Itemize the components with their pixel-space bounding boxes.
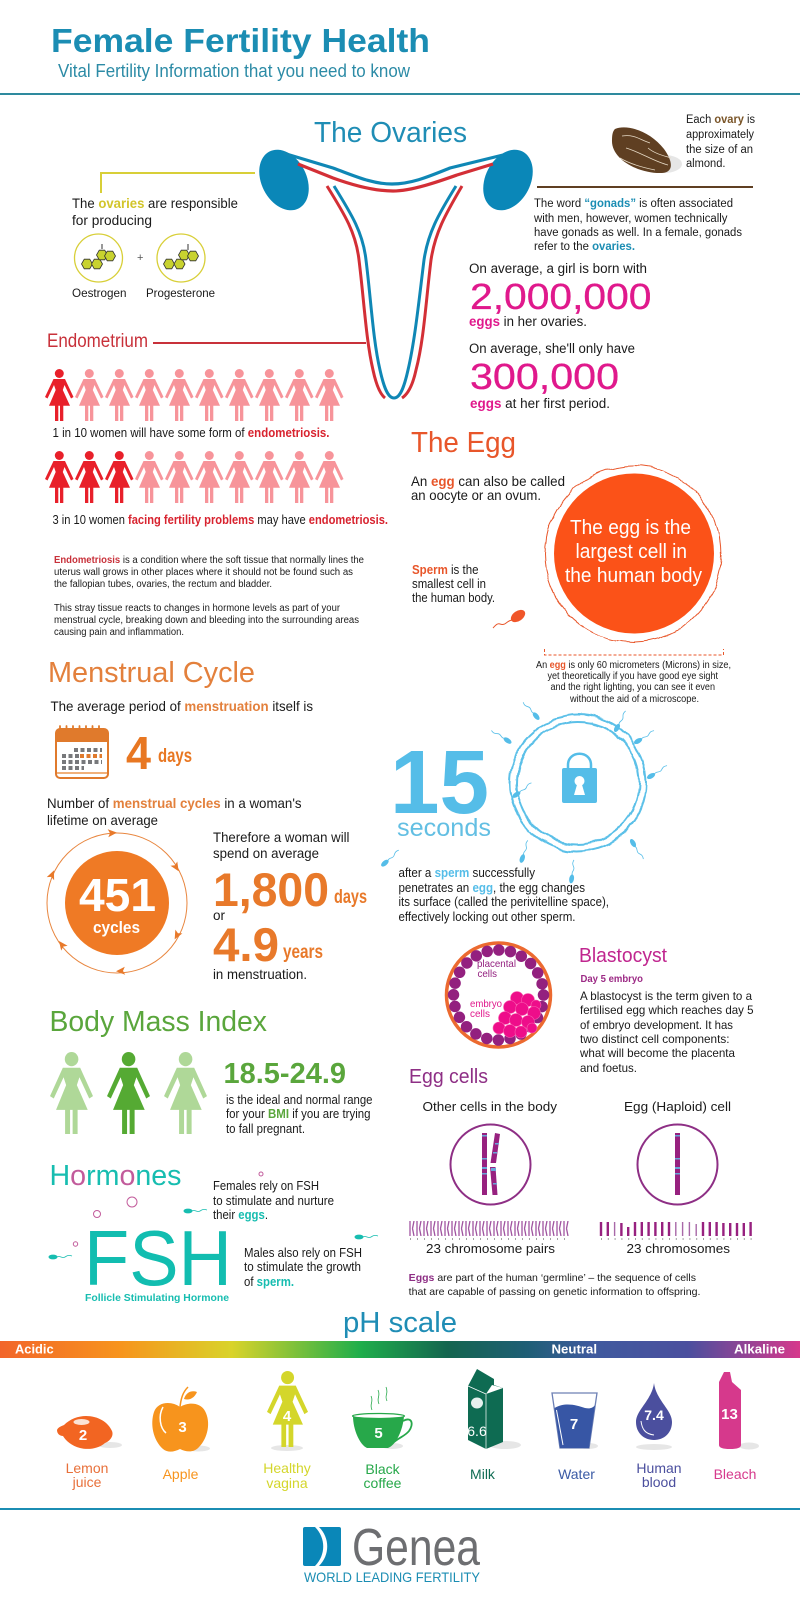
karyotype: 23 chromosome pairs [409, 1221, 570, 1239]
illustration: blastocyst: cells [478, 968, 497, 980]
text: blastocyst: what will become the placenta [579, 1046, 735, 1060]
text: average period: The average period of menstruation itself is [50, 698, 313, 714]
stat: eggs at birth: eggs in her ovaries. [469, 314, 587, 329]
text: females FSH: Females rely on FSH [213, 1179, 319, 1193]
text: egg size: An egg is only 60 micrometers (Microns) in size, [536, 660, 731, 671]
icon: healthy vagina figure: 4 [283, 1408, 292, 1425]
labels: pH items: coffee [364, 1475, 402, 1491]
pictogram: BMI women [50, 1052, 207, 1134]
labels: pH items: Milk [470, 1466, 496, 1482]
logo: Genea [303, 1519, 481, 1585]
icon: calendar [56, 726, 108, 778]
text: males FSH: of sperm. [244, 1275, 294, 1289]
text: endometriosis explanation: This stray tissue reacts to changes in hormone levels as part of your [54, 603, 341, 614]
stat: eggs at first period: 300,000 [470, 356, 619, 397]
icon: bleach bottle: 13 [721, 1406, 738, 1423]
text: number of cycles [47, 795, 302, 828]
text: blastocyst: A blastocyst is the term given to a [580, 989, 752, 1003]
illustration: blastocyst [446, 943, 550, 1047]
text: males FSH: to stimulate the growth [244, 1260, 361, 1274]
text: gonads: refer to the ovaries. [534, 241, 635, 253]
text: gonads: have gonads as well. In a female, gonads [534, 227, 742, 239]
fallopian tubes [283, 153, 503, 191]
labels: pH items: juice [72, 1474, 102, 1490]
text: endometriosis explanation: uterus wall grows in other places where it should not be found such as [54, 567, 353, 578]
heading: Egg cells: Egg cells [409, 1066, 488, 1088]
icon: coffee cup: 5 [374, 1425, 383, 1442]
text: after a sperm: penetrates an egg, the egg changes [398, 881, 585, 895]
stat: eggs at first period: eggs at her first period. [470, 396, 610, 411]
text: sperm smallest: Sperm is the [412, 563, 479, 577]
labels: pH items: vagina [266, 1475, 308, 1491]
diagram: uterus and ovaries [249, 141, 543, 398]
decoration: hormone bubbles and sperm [48, 1172, 378, 1259]
labels: pH items: Water [558, 1466, 595, 1482]
stat: 4 days: 4 [126, 727, 151, 779]
labels: pH items: Apple [163, 1466, 199, 1482]
icon: oestrogen [74, 234, 122, 282]
labels: pH items: Human [636, 1460, 682, 1476]
text: therefore: spend on average [213, 845, 319, 861]
text: or: or [213, 907, 225, 923]
pH gradient bar [0, 1341, 800, 1358]
icon: progesterone [157, 234, 205, 282]
illustration: blastocyst: placental [477, 958, 516, 970]
labels: cell types: Other cells in the body [422, 1099, 558, 1114]
text: females FSH: their eggs. [213, 1208, 268, 1222]
karyotype: 23 chromosomes [601, 1222, 755, 1239]
stat: BMI range: 18.5-24.9 [224, 1058, 346, 1090]
icon: apple: 3 [178, 1419, 187, 1436]
text: ovaries role [72, 196, 238, 228]
text: BMI explanation: for your BMI if you are trying [226, 1107, 371, 1121]
text: BMI explanation [226, 1093, 373, 1136]
stat: 4 days [126, 727, 192, 779]
text: ovaries role: for producing [72, 213, 152, 228]
left ovary [249, 141, 319, 219]
text: blastocyst: of embryo development. It has [580, 1018, 733, 1032]
text: 1 in 10: 1 in 10 women will have some form of endometriosis. [52, 426, 330, 440]
stat: 1,800 days: 1,800 [213, 863, 329, 916]
text: BMI explanation: to fall pregnant. [226, 1122, 305, 1136]
stat: eggs at birth: On average, a girl is born with [469, 261, 647, 276]
text: gonads: with men, however, women technically [533, 213, 728, 225]
icon: blood drop [636, 1383, 672, 1450]
stat: 15 seconds: 15 [390, 733, 489, 833]
stat: 4.9 years: 4.9 [213, 918, 279, 971]
illustration: blastocyst: cells [470, 1008, 490, 1020]
text: germline: that are capable of passing on genetic information to offspring. [409, 1286, 700, 1298]
subheading: Day 5 embryo: Day 5 embryo [580, 973, 643, 985]
illustration: egg cell: The egg is the [570, 517, 691, 539]
labels: hormones [72, 286, 215, 300]
callout line: ovaries [101, 173, 255, 193]
text: blastocyst: two distinct cell components: [580, 1032, 730, 1046]
heading: Hormones: Hormones [50, 1160, 182, 1192]
text: endometriosis explanation: Endometriosis is a condition where the soft tissue that normally lines the [54, 555, 364, 566]
label: 23 chromosome pairs: 23 chromosome pairs [426, 1241, 556, 1256]
labels: cell types: Egg (Haploid) cell [624, 1099, 731, 1114]
text: oocyte: an oocyte or an ovum. [411, 487, 541, 503]
labels: pH items: Black [365, 1461, 401, 1477]
illustration: egg cell: largest cell in [576, 541, 687, 563]
pH gradient bar: Acidic [15, 1342, 54, 1356]
text: after a sperm: effectively locking out other sperm. [398, 910, 576, 924]
text: number of cycles: Number of menstrual cycles in a woman's [47, 795, 302, 811]
sperm around egg [380, 700, 669, 884]
uterus outline [327, 186, 462, 398]
icon: sperm [493, 607, 527, 628]
stat: 4.9 years [213, 918, 323, 971]
labels: pH items: Healthy [263, 1460, 311, 1476]
text: after a sperm: its surface (called the perivitelline space), [398, 895, 609, 909]
illustration: egg cell [545, 466, 721, 642]
illustration: locked egg [380, 700, 669, 884]
text: blastocyst: and foetus. [580, 1061, 637, 1075]
labels: pH items: Lemon [66, 1460, 108, 1476]
plus sign: + [137, 252, 143, 264]
text: egg size: without the aid of a microscope. [569, 694, 699, 705]
text: females FSH: to stimulate and nurture [213, 1194, 334, 1208]
caption: FSH: Follicle Stimulating Hormone [85, 1292, 229, 1304]
text: males FSH: Males also rely on FSH [244, 1246, 362, 1260]
diagram: other cell chromosomes [450, 1124, 530, 1204]
icon: bleach bottle [719, 1372, 759, 1450]
text: gonads [533, 198, 742, 253]
text: egg size [536, 660, 731, 705]
text: endometriosis explanation: causing pain and inflammation. [54, 627, 184, 638]
heading: Blastocyst: Blastocyst [579, 945, 667, 967]
text: blastocyst [579, 989, 754, 1075]
chart: 451 cycles ring: 451 [79, 869, 156, 921]
text: endometriosis explanation: the fallopian tubes, ovaries, the rectum and bladder. [54, 579, 272, 590]
chart: 451 cycles ring [47, 829, 187, 975]
text: in menstruation: in menstruation. [213, 966, 307, 982]
icon: apple [152, 1387, 210, 1452]
stat: eggs at birth: 2,000,000 [470, 276, 652, 317]
pH gradient bar: Alkaline [734, 1342, 785, 1356]
right ovary [473, 141, 543, 219]
stat: 4.9 years: years [283, 942, 323, 963]
stat: 4 days: days [158, 746, 192, 767]
text: endometriosis explanation [54, 555, 364, 638]
text: sperm smallest [412, 563, 495, 605]
icon: milk carton: 6.6 [467, 1423, 487, 1439]
text: almond size: almond. [686, 158, 726, 170]
text: therefore [213, 829, 350, 861]
icon: coffee cup [352, 1387, 412, 1449]
logo: Genea: Genea [352, 1519, 480, 1577]
text: females FSH [213, 1179, 334, 1222]
labels: pH items: blood [642, 1474, 676, 1490]
text: BMI explanation: is the ideal and normal range [226, 1093, 373, 1107]
text: therefore: Therefore a woman will [213, 829, 350, 845]
icon: blood drop: 7.4 [644, 1407, 664, 1423]
text: after a sperm [398, 866, 609, 924]
icon: water glass [552, 1393, 598, 1449]
stat: 1,800 days: days [334, 887, 367, 908]
text: almond size: approximately [686, 129, 754, 141]
icon: almond [612, 127, 682, 173]
text: after a sperm: after a sperm successfully [398, 866, 536, 880]
labels: cell types [422, 1099, 731, 1114]
title: Female Fertility Health [51, 22, 430, 59]
bracket: egg size [544, 649, 724, 655]
text: almond size [686, 114, 755, 170]
text: almond size: Each ovary is [686, 114, 755, 126]
text: blastocyst: fertilised egg which reaches day 5 [580, 1003, 754, 1017]
stat: eggs at first period: On average, she'll only have [469, 341, 635, 356]
subtitle: Vital Fertility Information that you need to know [58, 61, 411, 81]
logo: Genea: WORLD LEADING FERTILITY [304, 1569, 481, 1585]
text: number of cycles: lifetime on average [47, 812, 158, 828]
heading: Menstrual Cycle: Menstrual Cycle [48, 657, 255, 689]
stat: eggs at first period [469, 341, 635, 411]
stat: eggs at birth [469, 261, 652, 329]
text: egg size: yet theoretically if you have good eye sight [548, 671, 718, 682]
heading: Body Mass Index: Body Mass Index [50, 1006, 267, 1038]
text: oocyte [411, 473, 565, 503]
heading: The Ovaries: The Ovaries [314, 117, 467, 149]
text: oocyte: An egg can also be called [411, 473, 565, 489]
heading: pH scale: pH scale [343, 1307, 457, 1339]
pictogram: 3 in 10 women [45, 451, 344, 503]
text: sperm smallest: smallest cell in [412, 577, 486, 591]
label: 23 chromosomes: 23 chromosomes [626, 1241, 731, 1256]
wordmark: FSH: FSH [84, 1214, 232, 1302]
icon: milk carton [467, 1369, 521, 1449]
pictogram: 1 in 10 women [45, 369, 344, 421]
icon: water glass: 7 [570, 1416, 578, 1433]
illustration: egg cell: the human body [565, 565, 702, 587]
text: almond size: the size of an [686, 144, 753, 156]
text: endometriosis explanation: menstrual cycle, breaking down and bleeding into the surrounding areas [54, 615, 359, 626]
labels: pH items [66, 1460, 756, 1491]
icon: lemon [57, 1416, 122, 1449]
text: 3 in 10: 3 in 10 women facing fertility problems may have endometriosis. [52, 513, 388, 527]
text: egg size: and the right lighting, you can see it even [550, 682, 715, 693]
text: germline [409, 1272, 700, 1298]
icon: lemon: 2 [79, 1427, 87, 1444]
text: ovaries role: The ovaries are responsible [72, 196, 238, 211]
illustration: blastocyst: embryo [470, 998, 502, 1010]
stat: 15 seconds: seconds [397, 814, 491, 842]
text: germline: Eggs are part of the human ‘germline’ – the sequence of cells [409, 1272, 696, 1284]
labels: hormones: Progesterone [146, 286, 215, 300]
text: sperm smallest: the human body. [412, 591, 495, 605]
diagram: haploid cell chromosome [638, 1124, 718, 1204]
text: males FSH [244, 1246, 362, 1289]
labels: pH items: Bleach [714, 1466, 756, 1482]
labels: hormones: Oestrogen [72, 286, 126, 300]
pH gradient bar: Neutral [552, 1342, 597, 1356]
icon: padlock [562, 754, 597, 803]
icon: healthy vagina figure [267, 1371, 308, 1451]
chart: 451 cycles ring: cycles [93, 918, 140, 937]
heading: The Egg: The Egg [411, 427, 516, 459]
text: gonads: The word “gonads” is often associated [534, 198, 733, 210]
heading: Endometrium: Endometrium [47, 331, 148, 352]
